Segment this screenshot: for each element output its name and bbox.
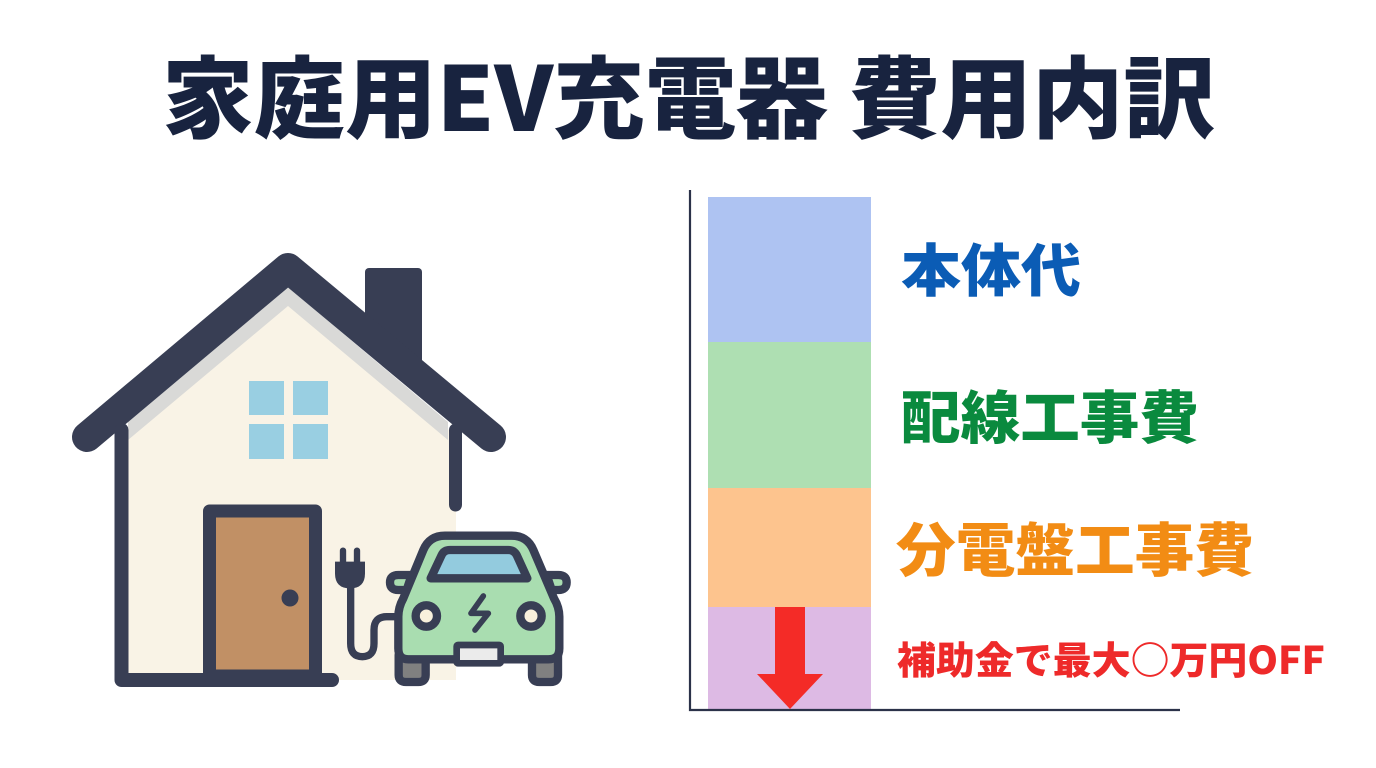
door — [210, 511, 316, 676]
segment: panel work — [708, 488, 871, 607]
label: 本体代: 本体代 — [901, 226, 1081, 308]
window — [249, 381, 328, 459]
license plate — [457, 645, 501, 663]
icon: electric car — [390, 536, 567, 682]
label: subsidy discount: 補助金で最大○万円OFF — [897, 630, 1325, 685]
right wall — [449, 430, 462, 505]
icon: plug and cable — [335, 551, 400, 657]
title: 家庭用EV充電器 費用内訳 — [162, 28, 1215, 157]
segment: wiring — [708, 342, 871, 488]
label: 配線工事費: 配線工事費 — [901, 373, 1199, 455]
arrow: subsidy reduction — [757, 607, 823, 709]
icon: house with EV charging — [87, 268, 567, 682]
stacked bar chart — [690, 190, 1180, 710]
roof — [87, 268, 491, 437]
headlights — [416, 605, 437, 627]
segment: body cost — [708, 197, 871, 342]
segment: subsidy — [708, 607, 871, 709]
windshield — [431, 550, 527, 578]
wheels — [399, 655, 426, 682]
body — [398, 536, 559, 659]
lightning bolt — [471, 596, 488, 630]
mirrors — [390, 575, 412, 590]
house wall — [122, 290, 456, 680]
label: 分電盤工事費: 分電盤工事費 — [896, 504, 1254, 588]
axes — [690, 190, 1180, 710]
walls and floor — [122, 430, 332, 680]
roof underside shadow — [128, 287, 448, 440]
chimney — [365, 268, 422, 378]
